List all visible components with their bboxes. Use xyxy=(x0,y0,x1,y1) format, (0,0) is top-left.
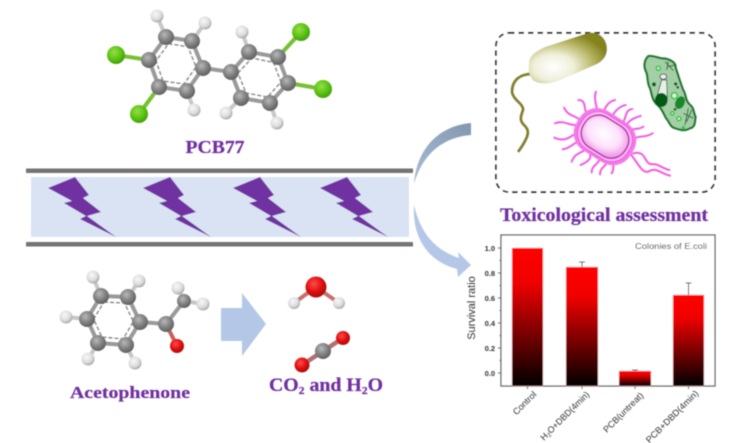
icon: green protozoan xyxy=(644,56,696,130)
chart legend text: Colonies of E.coli xyxy=(635,242,707,251)
label: CO2 and H2O: 2 xyxy=(299,385,305,397)
arrow: curved arrow down to survival chart xyxy=(414,205,471,277)
x axis labels: PCB(untreat) xyxy=(601,390,645,435)
x axis labels: H xyxy=(538,431,550,442)
label: CO2 and H2O: O xyxy=(368,376,383,396)
label: Acetophenone: Acetophenone xyxy=(70,383,191,402)
bars xyxy=(512,248,704,386)
label: CO2 and H2O: and H xyxy=(305,376,362,396)
icon: pink flagellated bacterium xyxy=(554,92,670,176)
y axis labels: 1.0 xyxy=(485,244,495,253)
label: CO2 and H2O: 2 xyxy=(362,385,368,397)
reactor: plasma plates and lightning bolts xyxy=(26,168,413,246)
icon: lightning bolt 4 xyxy=(320,177,388,237)
x axis labels xyxy=(511,388,700,443)
y axis labels: 0.8 xyxy=(485,269,495,278)
arrow: curved arrow up to toxicological assessment xyxy=(414,123,471,184)
y axis title: Survival ratio xyxy=(466,276,478,340)
error bars xyxy=(579,262,692,371)
y axis ticks xyxy=(498,248,688,389)
bar chart: survival ratio of E. coli colonies xyxy=(466,235,715,443)
molecule: carbon dioxide xyxy=(294,331,350,372)
icon: rod bacterium with flagellum xyxy=(512,33,607,152)
x axis labels: Control xyxy=(511,389,538,417)
label: PCB77: PCB77 xyxy=(186,137,244,157)
y axis labels: 0.6 xyxy=(485,294,495,303)
label: CO2 and H2O: CO xyxy=(269,376,297,396)
label: Toxicological assessment: Toxicological assessment xyxy=(500,206,709,226)
arrow: block arrow to products xyxy=(221,293,266,356)
molecule: water xyxy=(288,276,345,309)
icon: lightning bolt 3 xyxy=(233,177,301,237)
x axis labels: 2 xyxy=(547,432,554,439)
icon: lightning bolt 2 xyxy=(143,177,211,237)
panel: toxicological organisms xyxy=(496,33,715,192)
molecule: PCB77 xyxy=(107,10,332,130)
x axis labels: O+DBD(4min) xyxy=(545,389,591,436)
y axis labels: 0.4 xyxy=(485,319,496,328)
icon: lightning bolt 1 xyxy=(48,177,116,237)
y axis labels: 0.0 xyxy=(485,369,495,378)
chart frame xyxy=(501,235,715,386)
y axis labels xyxy=(485,244,496,378)
y axis labels: 0.2 xyxy=(485,344,495,353)
molecule: acetophenone xyxy=(60,270,210,370)
